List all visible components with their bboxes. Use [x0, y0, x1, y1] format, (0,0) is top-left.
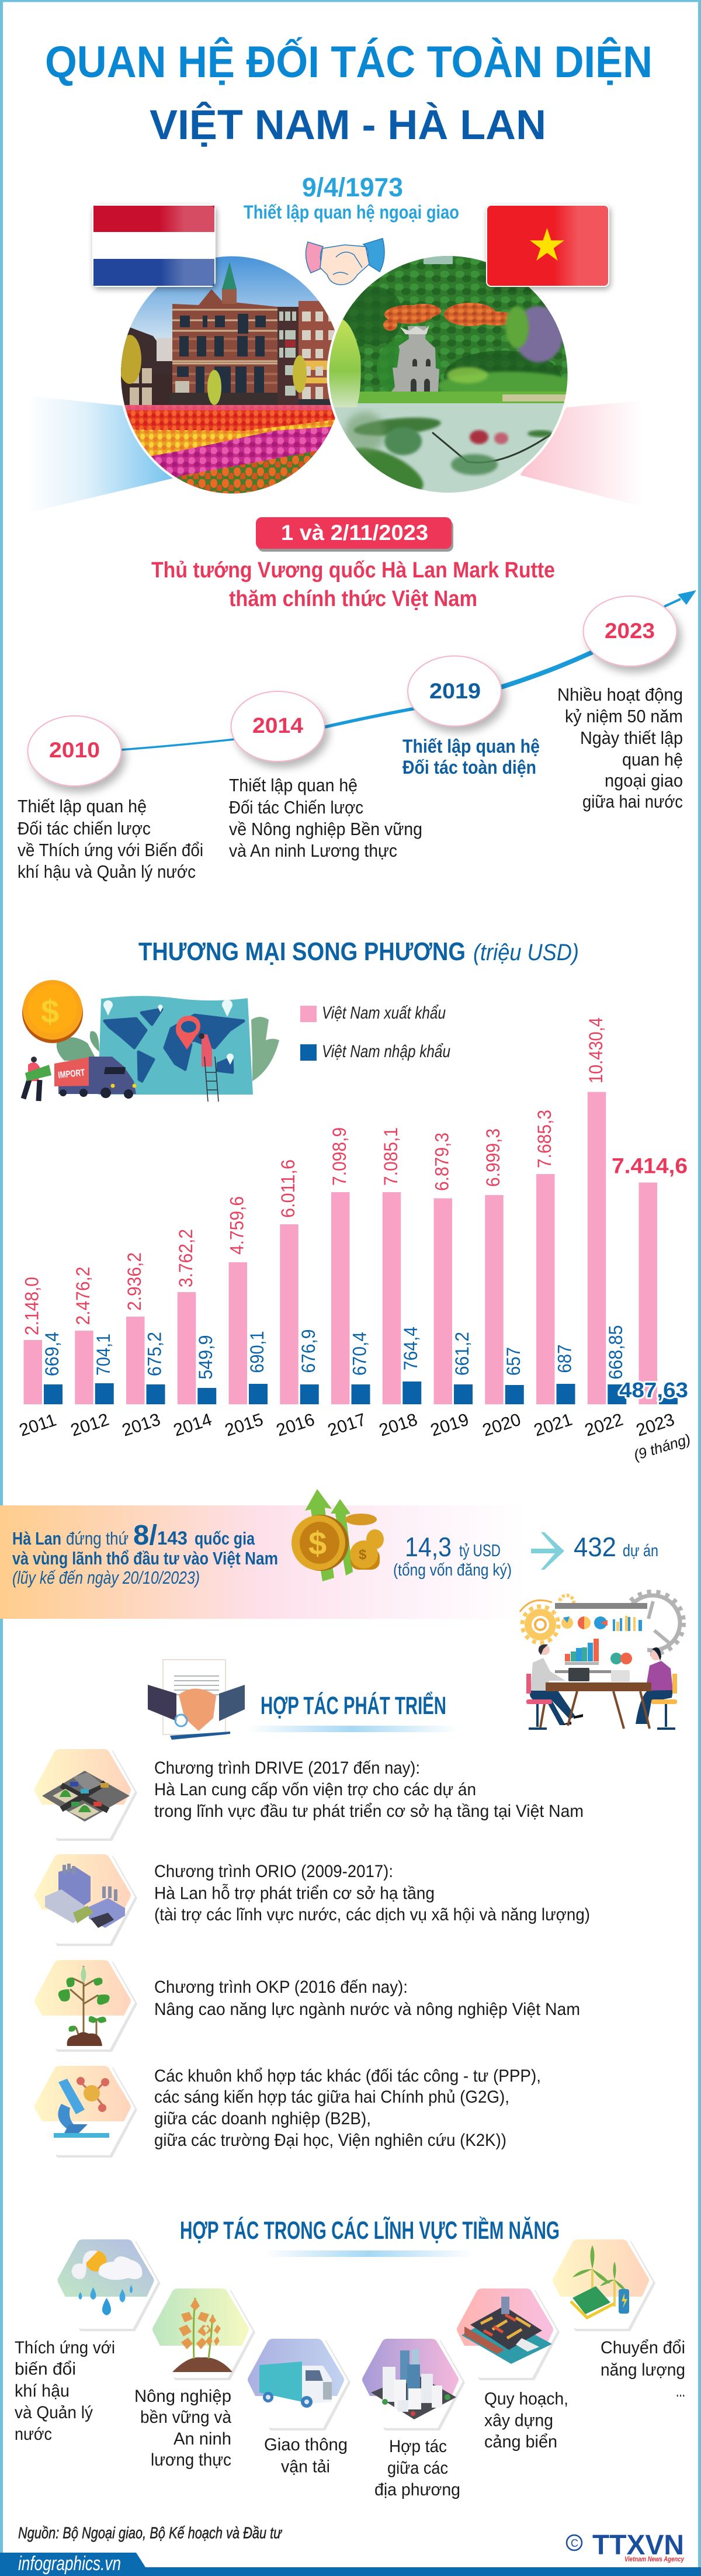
investment ranking text: Việt Nam [213, 1548, 278, 1569]
label: energy [601, 2338, 685, 2401]
text: Nâng cao năng lực ngành nước và nông nghiệp Việt Nam [154, 2000, 580, 2019]
icon: gold coins and arrows: $ [359, 1547, 367, 1563]
bar chart: 2.476,2 [72, 1267, 93, 1325]
timeline node 2010 [28, 716, 122, 786]
timeline text 2014: về Nông nghiệp Bền vững [229, 819, 422, 839]
hexagon: agriculture [152, 2288, 255, 2380]
text [154, 1862, 590, 1924]
bar chart: 2014 [171, 1410, 214, 1441]
bar chart: 2013 [120, 1410, 163, 1441]
timeline node 2014: 2014 [252, 714, 303, 738]
text [154, 1758, 584, 1821]
timeline text 2010: khí hậu và Quản lý nước [18, 861, 196, 882]
visit heading: Thủ tướng Vương quốc Hà Lan Mark Rutte [151, 558, 555, 583]
icon: signed contract handshake [148, 1660, 245, 1740]
source: Nguồn: Bộ Ngoại giao, Bộ Kế hoạch và Đầu tư [18, 2523, 283, 2542]
label: energy: ... [676, 2381, 685, 2401]
timeline text 2019: Thiết lập quan hệ [402, 736, 540, 757]
label: localities: địa phương [374, 2480, 460, 2499]
label: seaport: xây dựng [484, 2411, 553, 2430]
illustration: map, coin, truck: IMPORT [58, 1068, 85, 1081]
bar chart: 7.098,9 [329, 1127, 350, 1186]
timeline text 2023 [557, 684, 683, 812]
label: climate: và Quản lý [15, 2403, 93, 2422]
flag: Vietnam [486, 205, 609, 287]
footer: infographics.vn [18, 2553, 121, 2575]
bar chart: 2022 [582, 1410, 626, 1441]
development cooperation heading [148, 1660, 458, 1740]
program: OKP [34, 1960, 580, 2052]
label: agriculture: Nông nghiệp [134, 2387, 231, 2406]
timeline text 2010: Đối tác chiến lược [18, 818, 151, 839]
bar chart: 2018 [377, 1410, 420, 1441]
logo: TTXVN: C [571, 2537, 578, 2549]
timeline text 2023: Nhiều hoạt động [557, 684, 683, 705]
title [45, 37, 653, 148]
text: trong lĩnh vực đầu tư phát triển cơ sở hạ tầng tại Việt Nam [154, 1802, 584, 1821]
label: climate: Thích ứng với [15, 2338, 115, 2357]
investment capital: tỷ USD [459, 1542, 501, 1560]
visit heading [151, 558, 555, 611]
investment band [0, 1505, 526, 1619]
investment capital [393, 1532, 512, 1580]
bar chart: 6.011,6 [277, 1159, 299, 1218]
left blue wing [27, 396, 174, 513]
investment ranking text: và vùng lãnh thổ đầu tư vào [12, 1548, 209, 1569]
hexagon: seaport [457, 2288, 560, 2380]
legend [300, 1003, 450, 1061]
bar chart: 7.414,6 [612, 1154, 688, 1178]
legend: Việt Nam nhập khẩu [322, 1042, 450, 1061]
project count: dự án [623, 1542, 658, 1560]
investment ranking text: quốc gia [195, 1528, 255, 1549]
text [154, 2066, 541, 2150]
text: Chương trình DRIVE (2017 đến nay): [154, 1758, 420, 1778]
date pill [256, 517, 453, 552]
program: DRIVE [34, 1749, 584, 1841]
bar chart: 4.759,6 [227, 1196, 248, 1255]
logo: TTXVN: TTXVN [592, 2530, 684, 2561]
project count [574, 1532, 658, 1562]
investment ranking text: (lũy kế đến ngày 20/10/2023) [12, 1567, 200, 1588]
investment capital: 14,3 [405, 1532, 452, 1562]
flame trees [383, 303, 517, 331]
label: agriculture: An ninh [173, 2429, 231, 2449]
text: Hà Lan cung cấp vốn viện trợ cho các dự án [154, 1780, 476, 1799]
timeline text 2019: Đối tác toàn diện [402, 757, 536, 778]
timeline text 2023: ngoại giao [605, 770, 683, 791]
trade heading: (triệu USD) [473, 940, 579, 965]
label: energy: Chuyển đổi [601, 2338, 685, 2357]
title: VIỆT NAM - HÀ LAN [150, 102, 546, 148]
label: climate: biến đổi [15, 2360, 76, 2378]
timeline node 2023 [583, 596, 676, 666]
bar chart: 2011 [17, 1410, 59, 1441]
investment ranking text: 143 [157, 1528, 188, 1549]
bar chart: 764,4 [400, 1327, 421, 1370]
investment ranking text: 8/ [133, 1520, 157, 1551]
date 1973 [244, 172, 459, 223]
label: seaport [484, 2389, 568, 2452]
bar chart: 2019 [428, 1410, 471, 1441]
label: localities: giữa các [387, 2459, 448, 2478]
bar chart: 3.762,2 [175, 1229, 196, 1287]
bar chart [17, 1017, 692, 1464]
program: other frameworks [34, 2066, 541, 2158]
label: energy: năng lượng [601, 2360, 685, 2380]
timeline text 2023: giữa hai nước [582, 791, 683, 812]
text [154, 1978, 580, 2019]
label: localities: Hợp tác [389, 2437, 447, 2456]
timeline text 2010: về Thích ứng với Biến đổi [18, 840, 203, 860]
timeline text 2014: và An ninh Lương thực [229, 840, 397, 861]
label: transport [264, 2435, 348, 2477]
investment ranking text: đứng thứ [66, 1528, 129, 1549]
bar chart: 487,63 [619, 1378, 688, 1402]
bar chart: 2017 [325, 1410, 369, 1441]
bar chart: 668,85 [605, 1325, 626, 1379]
icon: handshake [306, 238, 384, 285]
bar chart: 675,2 [144, 1332, 165, 1376]
potential areas heading [180, 2217, 560, 2257]
text: giữa các doanh nghiệp (B2B), [154, 2109, 371, 2128]
visit heading: thăm chính thức Việt Nam [229, 587, 477, 611]
label: agriculture: lương thực [151, 2450, 231, 2470]
hexagon icon: microscope [34, 2066, 137, 2158]
bar chart: 690,1 [247, 1331, 268, 1373]
timeline text 2010 [18, 796, 203, 882]
bar chart: 7.685,3 [534, 1110, 555, 1168]
label: seaport: cảng biển [484, 2432, 557, 2452]
date 1973: 9/4/1973 [302, 172, 403, 202]
label: transport: Giao thông [264, 2435, 348, 2454]
hexagon: energy [553, 2239, 655, 2331]
label: agriculture: bền vững và [140, 2408, 231, 2427]
text: Chương trình OKP (2016 đến nay): [154, 1978, 408, 1997]
timeline node 2019: 2019 [429, 679, 481, 703]
hexagon: localities [362, 2339, 465, 2430]
bar chart: 6.999,3 [483, 1128, 504, 1187]
timeline text 2014: Đối tác Chiến lược [229, 797, 363, 818]
label: climate: nước [15, 2425, 52, 2444]
hexagon: climate [57, 2239, 160, 2331]
label: transport: vận tải [281, 2457, 330, 2477]
hexagon icon: factory [34, 1854, 137, 1946]
text: các sáng kiến hợp tác giữa hai Chính phủ (G2G), [154, 2087, 509, 2107]
timeline node 2023: 2023 [605, 619, 655, 643]
investment ranking text [12, 1520, 278, 1588]
bar chart: 661,2 [452, 1332, 473, 1376]
timeline text 2019 [402, 736, 540, 778]
bar chart: 704,1 [93, 1334, 114, 1376]
timeline text 2014: Thiết lập quan hệ [229, 775, 358, 795]
bar chart: 676,9 [298, 1329, 319, 1373]
footer [0, 2553, 701, 2576]
investment ranking text: Hà Lan [12, 1528, 61, 1549]
bar chart: 549,9 [195, 1335, 216, 1379]
program: ORIO [34, 1854, 590, 1946]
bar chart: 2015 [223, 1410, 266, 1441]
bar chart: 2.148,0 [21, 1277, 42, 1335]
investment capital: (tổng vốn đăng ký) [393, 1561, 512, 1580]
bar chart: 2016 [274, 1410, 317, 1441]
hexagon: transport [248, 2339, 350, 2430]
bar chart: 2020 [480, 1410, 523, 1441]
timeline node 2019 [408, 656, 501, 726]
hexagon icon: plant [34, 1960, 137, 2052]
bar chart: 2.936,2 [124, 1252, 145, 1311]
development cooperation heading: HỢP TÁC PHÁT TRIỂN [261, 1691, 446, 1720]
bar chart: 657 [503, 1347, 524, 1376]
logo: TTXVN: Vietnam News Agency [624, 2555, 685, 2563]
bar chart: 2012 [68, 1410, 112, 1441]
icon: gold coins and arrows [291, 1489, 384, 1581]
label: agriculture [134, 2387, 231, 2470]
illustration: map, coin, truck: $ [41, 993, 59, 1030]
timeline line and arrow [122, 590, 696, 750]
bar chart: 2023 [634, 1410, 677, 1441]
label: climate: khí hậu [15, 2381, 70, 2401]
photo: Netherlands buildings and tulips [121, 256, 335, 493]
bar chart: 10.430,4 [585, 1017, 606, 1083]
bar chart: 7.085,1 [380, 1127, 401, 1186]
label: climate [15, 2338, 115, 2444]
text: Hà Lan hỗ trợ phát triển cơ sở hạ tầng [154, 1884, 435, 1903]
icon: gold coins and arrows: $ [308, 1525, 327, 1561]
timeline text 2023: Ngày thiết lập [580, 728, 683, 748]
bar chart: 687 [554, 1344, 575, 1373]
bar chart: 670,4 [349, 1332, 370, 1376]
bar chart: 669,4 [41, 1332, 63, 1376]
trade heading: THƯƠNG MẠI SONG PHƯƠNG [138, 937, 466, 966]
text: Các khuôn khổ hợp tác khác (đối tác công - tư (PPP), [154, 2066, 541, 2086]
label: seaport: Quy hoạch, [484, 2389, 568, 2409]
right pink wing [520, 401, 643, 507]
photo: Hoan Kiem lake and Turtle Tower [327, 251, 578, 503]
bar chart: (9 tháng) [632, 1431, 692, 1464]
flag: Netherlands [92, 205, 216, 287]
bar chart: 6.879,3 [431, 1133, 452, 1191]
bar chart: 2021 [532, 1410, 575, 1441]
illustration: map, coin, truck [22, 980, 279, 1102]
label: localities [374, 2437, 460, 2499]
illustration: business meeting [520, 1592, 683, 1729]
legend: Việt Nam xuất khẩu [322, 1003, 446, 1023]
title: QUAN HỆ ĐỐI TÁC TOÀN DIỆN [45, 37, 653, 87]
date 1973: Thiết lập quan hệ ngoại giao [244, 202, 459, 223]
text: (tài trợ các lĩnh vực nước, các dịch vụ xã hội và năng lượng) [154, 1905, 590, 1924]
timeline node 2014 [231, 691, 325, 761]
timeline text 2010: Thiết lập quan hệ [18, 796, 147, 816]
text: giữa các trường Đại học, Viện nghiên cứu (K2K)) [154, 2131, 506, 2150]
project count: 432 [574, 1532, 616, 1562]
text: Chương trình ORIO (2009-2017): [154, 1862, 393, 1881]
timeline text 2014 [229, 775, 422, 861]
timeline text 2023: kỷ niệm 50 năm [565, 706, 683, 726]
hexagon icon: city crossroads [34, 1749, 137, 1841]
date pill: 1 và 2/11/2023 [281, 521, 428, 545]
timeline node 2010: 2010 [49, 738, 100, 762]
timeline text 2023: quan hệ [622, 749, 683, 770]
arrow to projects [531, 1532, 564, 1570]
